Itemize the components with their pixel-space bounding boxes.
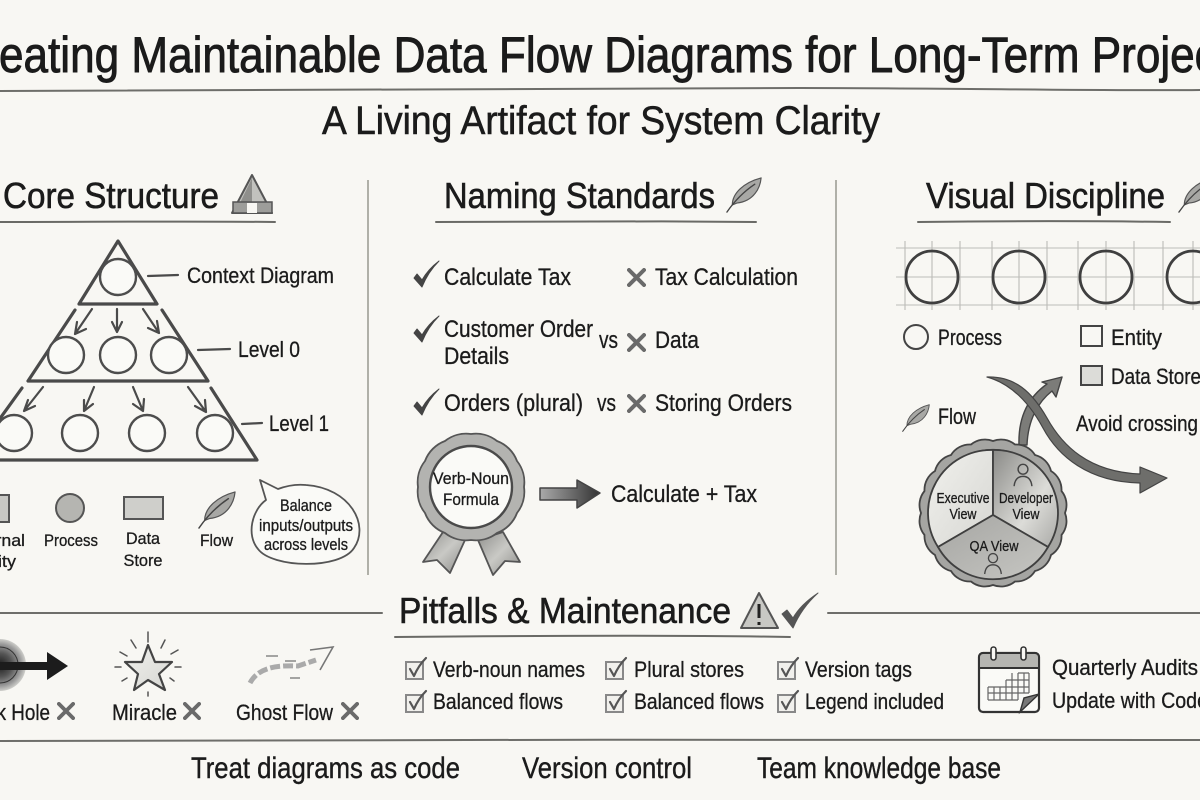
footer: team knowledge base: Team knowledge base <box>757 752 1001 785</box>
wheel: stakeholder views: Executive <box>936 490 990 507</box>
text: maintenance cadence <box>1052 655 1200 713</box>
badge: verb-noun formula: Verb-Noun <box>433 469 509 488</box>
icon: quill <box>727 178 761 212</box>
legend item: flow: Flow <box>200 531 234 550</box>
legend item: data store <box>124 497 163 570</box>
example: calculate + tax: Calculate + Tax <box>611 481 757 508</box>
row: customer order details vs data: vs <box>599 327 618 354</box>
label: level 0: Level 0 <box>238 337 300 362</box>
arrow: crossing flow down <box>987 377 1167 493</box>
panel: pitfalls and maintenance <box>0 590 1200 725</box>
legend: symbols <box>0 492 235 571</box>
legend item: data store: Store <box>124 551 162 570</box>
wheel: stakeholder views <box>919 439 1067 587</box>
row: calculate tax vs tax calculation: Calculate Tax <box>444 264 571 291</box>
check item: plural stores: Plural stores <box>634 657 744 682</box>
check item: balanced flows: Balanced flows <box>634 689 764 714</box>
row: orders plural vs storing orders: Storing Orders <box>655 390 792 417</box>
icon: warning triangle <box>741 593 778 628</box>
icon: calendar <box>979 647 1039 712</box>
callout: balance inputs and outputs: inputs/outputs <box>259 516 353 535</box>
callout: balance inputs and outputs: Balance <box>280 496 332 515</box>
wedge: executive view <box>928 450 993 547</box>
wheel: stakeholder views: QA View <box>970 538 1019 555</box>
legend: flow <box>903 404 976 431</box>
pitfall: ghost flow: Ghost Flow <box>236 700 333 725</box>
heading: visual discipline: Visual Discipline <box>926 175 1165 216</box>
pitfall: miracle: Miracle <box>112 700 177 725</box>
callout: balance inputs and outputs <box>252 480 359 564</box>
wheel: stakeholder views: View <box>950 506 977 523</box>
arrow: crossing flow up <box>1019 377 1062 445</box>
chart: DFD level pyramid <box>0 241 262 460</box>
heading: naming standards: Naming Standards <box>444 175 715 216</box>
grid aligned circles <box>896 241 1200 310</box>
row: customer order details vs data <box>414 316 700 370</box>
wheel: stakeholder views: View <box>1012 506 1040 523</box>
heading: pitfalls and maintenance: Pitfalls & Maintenance <box>399 590 731 631</box>
legend: entity <box>1081 325 1162 350</box>
legend item: process: Process <box>44 531 98 550</box>
panel: naming standards <box>414 175 798 575</box>
panel: core structure <box>0 175 359 571</box>
legend: process <box>904 325 1002 350</box>
badge: verb-noun formula: Formula <box>443 490 499 509</box>
icon: check mark <box>782 593 818 628</box>
label: level 1: Level 1 <box>269 411 329 436</box>
wedge: developer view <box>993 450 1058 547</box>
panel: visual discipline <box>896 175 1200 587</box>
row: orders plural vs storing orders: Orders (plural) <box>444 390 583 417</box>
wheel: stakeholder views: Developer <box>999 490 1053 507</box>
check item: legend included: Legend included <box>805 689 944 714</box>
legend: process: Process <box>938 325 1002 350</box>
row: customer order details vs data: Data <box>655 327 700 354</box>
row: customer order details vs data: Customer Order <box>444 316 593 343</box>
icon: pyramid tent <box>232 175 272 213</box>
pitfall: ghost flow <box>236 647 357 725</box>
check item: balanced flows: Balanced flows <box>433 689 563 714</box>
pitfall: black hole <box>0 639 73 725</box>
footer: version control: Version control <box>522 752 692 785</box>
row: calculate tax vs tax calculation: Tax Calculation <box>655 264 798 291</box>
subtitle: A Living Artifact for System Clarity <box>322 99 880 143</box>
heading: core structure: Core Structure <box>3 175 219 216</box>
check item: verb-noun names: Verb-noun names <box>433 657 585 682</box>
icon: quill <box>1179 178 1200 212</box>
row: orders plural vs storing orders <box>414 389 792 417</box>
legend item: data store: Data <box>126 529 161 548</box>
badge: verb-noun formula <box>418 434 524 575</box>
check item: version tags: Version tags <box>805 657 912 682</box>
label: context diagram: Context Diagram <box>187 263 334 288</box>
legend: flow: Flow <box>938 404 976 429</box>
icon: qa person <box>985 554 1001 574</box>
wedge: qa view <box>938 515 1048 579</box>
row: orders plural vs storing orders: vs <box>597 390 616 417</box>
footer: treat diagrams as code: Treat diagrams as code <box>191 752 460 785</box>
checklist <box>406 657 944 714</box>
row: calculate tax vs tax calculation <box>414 261 798 291</box>
legend item: process <box>44 494 98 550</box>
arrow: formula to example <box>540 480 600 508</box>
icon: developer person <box>1014 464 1032 486</box>
legend: entity: Entity <box>1111 325 1162 350</box>
callout: balance inputs and outputs: across levels <box>264 535 348 554</box>
legend item: flow <box>199 492 235 550</box>
pitfall: miracle <box>112 632 199 725</box>
row: customer order details vs data: Details <box>444 343 509 370</box>
legend item: external entity <box>0 495 25 571</box>
